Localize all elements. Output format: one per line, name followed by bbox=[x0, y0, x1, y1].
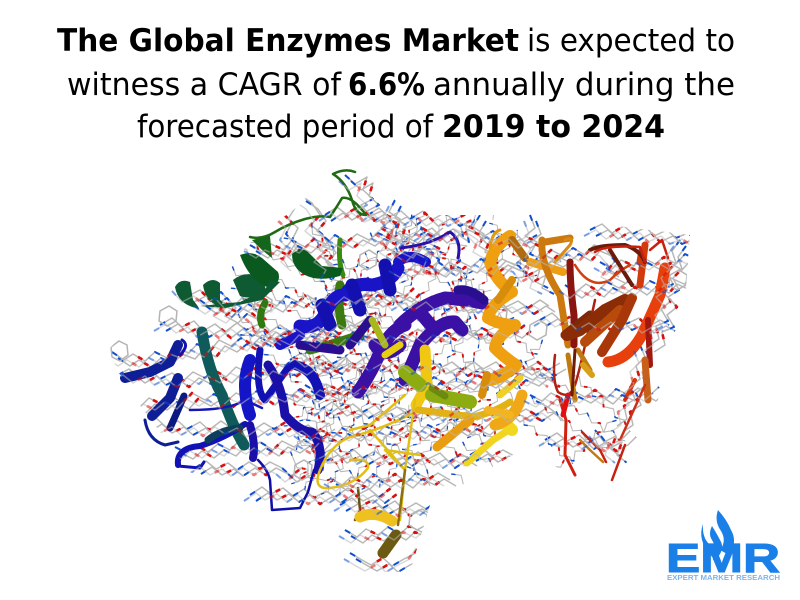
ribbon: purple helix bbox=[300, 290, 484, 392]
logo tagline: EXPERT MARKET RESEARCH bbox=[667, 575, 780, 582]
title: The Global Enzymes Market bbox=[57, 23, 519, 59]
logo wordmark: EMR bbox=[666, 535, 780, 581]
title bbox=[57, 23, 735, 145]
ribbon: dark green helix bbox=[175, 236, 343, 309]
ribbon: orange helix bbox=[482, 230, 522, 425]
title: is expected to bbox=[527, 23, 735, 59]
ribbon: green loops bbox=[250, 170, 366, 350]
title: 2019 to 2024 bbox=[442, 109, 665, 145]
logo: Expert Market Research bbox=[666, 510, 780, 582]
title: witness a CAGR of bbox=[67, 67, 342, 103]
ribbon: main blue helix bbox=[280, 232, 459, 345]
title: forecasted period of bbox=[137, 109, 434, 145]
ribbon: red-orange sheets bbox=[560, 240, 668, 480]
ribbon: bottom yellow and olive bbox=[355, 470, 405, 553]
title: annually during the bbox=[433, 67, 735, 103]
enzyme protein ribbon structure bbox=[110, 169, 690, 572]
amino acid side-chain sticks bbox=[110, 174, 690, 572]
ribbon: navy and blue coils, left bbox=[125, 340, 320, 510]
ribbon: amber and brown strands bbox=[512, 238, 630, 400]
title: 6.6% bbox=[348, 67, 425, 103]
ribbon: yellow and green sheets, centre bbox=[318, 320, 520, 520]
icon: flame bbox=[701, 510, 734, 560]
ribbon: teal sheet bbox=[202, 332, 244, 445]
sticks passing over the ribbons bbox=[106, 181, 701, 572]
